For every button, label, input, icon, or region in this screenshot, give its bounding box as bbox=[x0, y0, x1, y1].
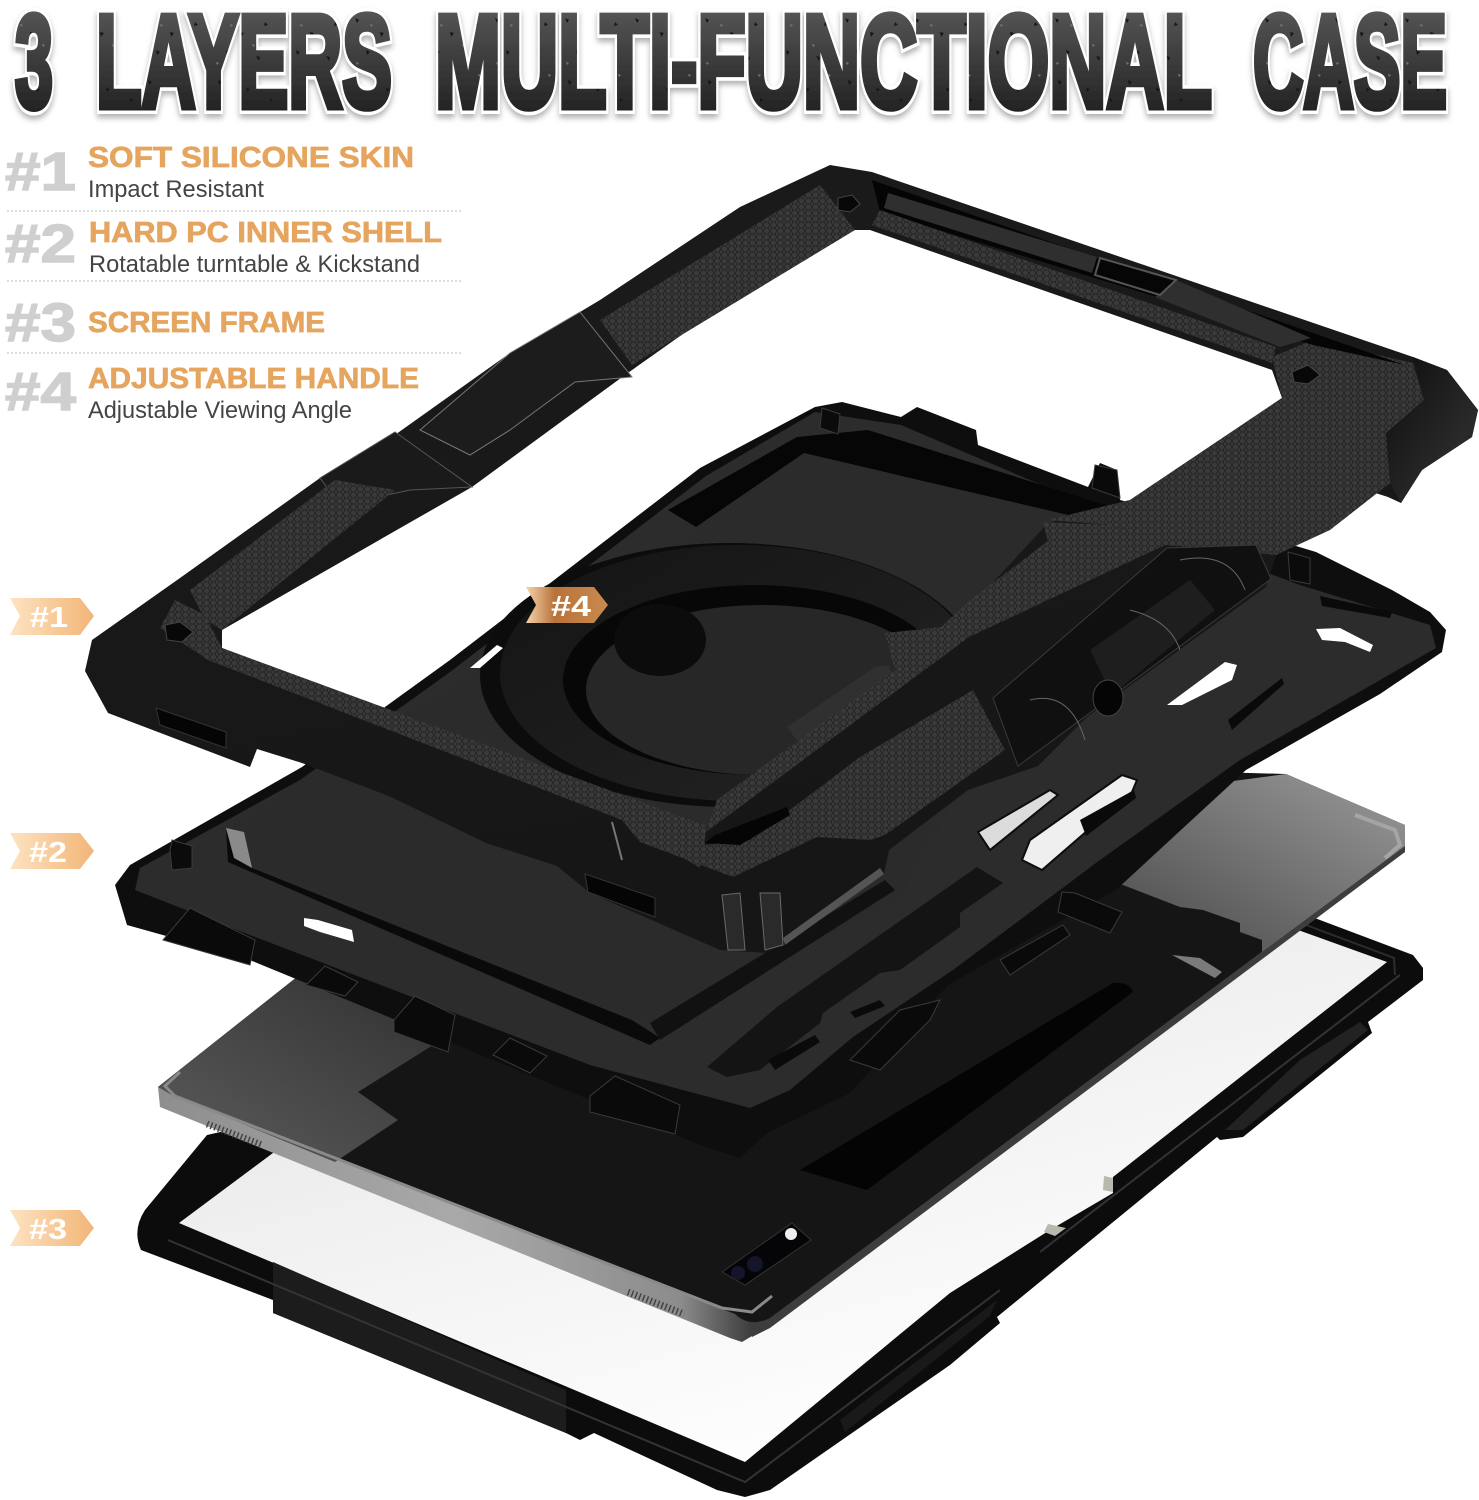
badge 4 bbox=[526, 587, 608, 623]
badge 4: #4 bbox=[551, 591, 591, 623]
feature 2: HARD PC INNER SHELL bbox=[89, 217, 442, 249]
textured left bar bottom bbox=[190, 480, 395, 630]
strap bbox=[706, 522, 1165, 832]
feature 3 bbox=[5, 293, 325, 353]
feature 3: SCREEN FRAME bbox=[88, 307, 325, 339]
tablet black band bbox=[800, 983, 1133, 1190]
layer 2: hard PC inner shell bbox=[115, 402, 1446, 1158]
handle housing bbox=[993, 545, 1271, 766]
slots bbox=[304, 596, 1392, 1070]
badge 3 bbox=[10, 1210, 94, 1246]
feature 1: Impact Resistant bbox=[88, 176, 264, 203]
hex post bbox=[170, 408, 1310, 870]
recessed channel bbox=[707, 867, 1003, 1077]
badge 3: #3 bbox=[29, 1214, 67, 1246]
feature 3: #3 bbox=[5, 293, 76, 353]
panel wing bbox=[226, 828, 252, 868]
black inner groove bbox=[668, 430, 1105, 527]
clips bbox=[163, 465, 1122, 1134]
turntable ring bbox=[480, 543, 980, 807]
feature 4: ADJUSTABLE HANDLE bbox=[88, 363, 419, 395]
feature 2: Rotatable turntable & Kickstand bbox=[89, 251, 420, 278]
camera bbox=[722, 1223, 811, 1285]
layer 1: soft silicone skin frame bbox=[85, 165, 1478, 953]
textured bottom strip bbox=[160, 600, 707, 868]
feature 2 bbox=[5, 214, 442, 278]
speaker grilles bbox=[207, 1124, 684, 1314]
badge 2: #2 bbox=[29, 837, 67, 869]
ports bbox=[156, 708, 655, 917]
feature 1: SOFT SILICONE SKIN bbox=[88, 142, 414, 174]
badge 2 bbox=[10, 833, 94, 869]
title bbox=[15, 0, 1447, 135]
feature 2: #2 bbox=[5, 214, 76, 274]
badge 1: #1 bbox=[30, 602, 68, 634]
wing 1 bbox=[420, 312, 632, 455]
feature 4: Adjustable Viewing Angle bbox=[88, 397, 352, 424]
feature 1 bbox=[5, 142, 414, 203]
top surface rim bbox=[135, 412, 1436, 1108]
feature 1: #1 bbox=[5, 142, 76, 202]
top bar panels bbox=[872, 180, 1405, 365]
bottom gray highlight bbox=[783, 868, 884, 945]
wing 2 bbox=[320, 432, 472, 505]
feature 4: #4 bbox=[5, 362, 76, 422]
feature 4 bbox=[5, 362, 419, 424]
corner ribs bbox=[722, 893, 783, 950]
hex nuts bbox=[165, 195, 1320, 642]
inner panel bbox=[226, 453, 1105, 1023]
layer: tablet bbox=[158, 760, 1405, 1342]
tablet glass reflection right bbox=[1090, 774, 1405, 952]
textured left bar top bbox=[600, 185, 855, 365]
corner cap bbox=[1386, 357, 1478, 503]
layer 3: screen frame bbox=[137, 917, 1423, 1497]
tablet glass reflection left bbox=[158, 973, 470, 1162]
textured lower right bar bbox=[622, 690, 1005, 877]
layer list: features bbox=[5, 142, 461, 424]
textured upper right bar bbox=[1047, 340, 1424, 555]
strap hole bbox=[705, 807, 790, 845]
badge 1 bbox=[10, 598, 94, 635]
